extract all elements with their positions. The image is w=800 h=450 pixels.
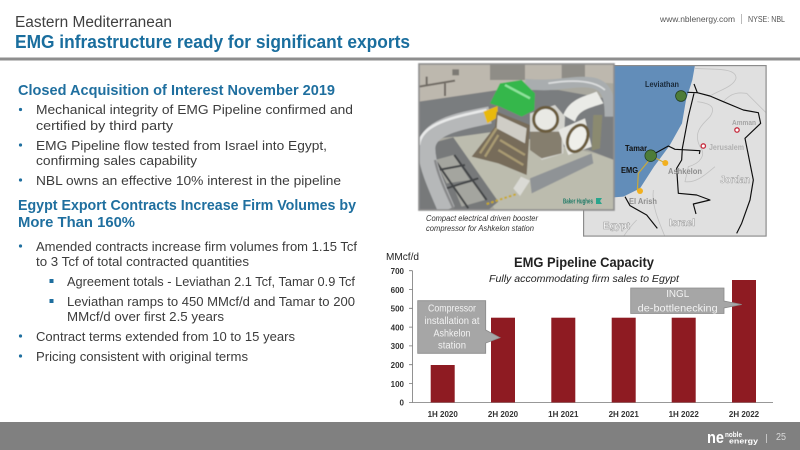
y-axis unit: MMcf/d bbox=[386, 252, 419, 263]
bullet list: contract terms: MMcf/d over first 2.5 years bbox=[67, 309, 225, 324]
bar chart: EMG pipeline capacity bbox=[386, 252, 773, 419]
y-axis labels: 300 bbox=[391, 342, 405, 351]
logo: Noble Energy: ne bbox=[707, 428, 724, 447]
map labels: Leviathan bbox=[645, 80, 679, 89]
bullet list: pipeline status bbox=[19, 102, 353, 188]
map labels: EMG bbox=[621, 166, 638, 175]
photo: booster compressor bbox=[419, 64, 614, 210]
y-axis labels: 500 bbox=[391, 304, 405, 314]
callout: compressor installation: Compressor bbox=[428, 304, 477, 315]
map: Eastern Mediterranean pipeline bbox=[580, 65, 767, 237]
map labels: Ashkelon bbox=[668, 167, 702, 176]
heading: export contracts bbox=[18, 197, 357, 231]
slide header bbox=[0, 14, 800, 60]
bullet list: contract terms: Contract terms extended from 10 to 15 years bbox=[36, 329, 295, 344]
x-axis labels bbox=[428, 410, 760, 419]
map labels: Egypt bbox=[603, 221, 631, 232]
callout: compressor installation: installation at bbox=[424, 316, 480, 327]
y-axis labels bbox=[391, 267, 405, 408]
icon: Ashkelon station bbox=[662, 160, 668, 166]
y-axis labels: 700 bbox=[391, 267, 405, 276]
logo: Baker Hughes: Baker Hughes bbox=[563, 198, 593, 206]
map labels: Jordan bbox=[720, 175, 750, 186]
website and ticker: NYSE: NBL bbox=[748, 15, 785, 24]
bullet list: pipeline status: Mechanical integrity of EMG Pipeline confirmed and bbox=[36, 102, 353, 117]
chart title: EMG Pipeline Capacity bbox=[514, 254, 654, 270]
website and ticker bbox=[659, 14, 785, 24]
y-axis labels: 0 bbox=[400, 398, 405, 408]
callout: compressor installation bbox=[418, 301, 500, 353]
map labels: Israel bbox=[669, 218, 695, 229]
panel: closed acquisition text bbox=[18, 82, 353, 188]
logo: Noble Energy: noble bbox=[725, 432, 742, 439]
logo: Noble Energy: energy bbox=[729, 438, 758, 446]
panel: export contracts text bbox=[18, 197, 357, 364]
icon: Leviathan field bbox=[676, 91, 686, 101]
photo caption: Compact electrical driven booster bbox=[426, 214, 538, 223]
map labels: Jerusalem bbox=[709, 143, 744, 152]
icon: El Arish station bbox=[637, 188, 643, 194]
y-axis labels: 400 bbox=[391, 324, 405, 332]
bullet list: contract terms: Pricing consistent with original terms bbox=[36, 349, 249, 364]
bullet list: pipeline status: NBL owns an effective 10% interest in the pipeline bbox=[36, 173, 341, 188]
chart subtitle: Fully accommodating firm sales to Egypt bbox=[489, 273, 680, 285]
axes bbox=[409, 271, 773, 402]
bullet list: contract terms bbox=[19, 239, 357, 364]
photo caption bbox=[426, 214, 538, 233]
bullet list: contract terms: Leviathan ramps to 450 MMcf/d and Tamar to 200 bbox=[67, 294, 355, 309]
website and ticker: www.nblenergy.com bbox=[659, 15, 735, 24]
bullet list: pipeline status: confirming sales capability bbox=[36, 153, 198, 168]
callout: compressor installation: station bbox=[438, 340, 466, 351]
y-axis labels: 200 bbox=[391, 361, 405, 370]
heading: closed acquisition: Closed Acquisition of Interest November 2019 bbox=[18, 82, 335, 99]
x-axis labels: 1H 2020 bbox=[428, 410, 458, 419]
map labels: Amman bbox=[732, 120, 756, 127]
bars bbox=[431, 280, 756, 402]
map labels: El Arish bbox=[629, 197, 657, 206]
x-axis labels: 2H 2022 bbox=[729, 410, 760, 419]
bullet list: contract terms: to 3 Tcf of total contracted quantities bbox=[36, 254, 250, 269]
icon: Jerusalem marker bbox=[701, 144, 706, 148]
footer bar bbox=[0, 422, 800, 450]
heading: export contracts: More Than 160% bbox=[18, 214, 135, 231]
x-axis labels: 2H 2020 bbox=[488, 410, 519, 419]
main title: EMG infrastructure ready for significant exports bbox=[15, 32, 410, 52]
y-axis labels: 600 bbox=[391, 286, 405, 295]
x-axis labels: 2H 2021 bbox=[609, 410, 639, 419]
x-axis labels: 1H 2021 bbox=[548, 410, 579, 419]
photo caption: compressor for Ashkelon station bbox=[426, 224, 535, 233]
bullet list: pipeline status: EMG Pipeline flow tested from Israel into Egypt, bbox=[36, 138, 327, 153]
map labels: Tamar bbox=[625, 144, 647, 153]
heading: export contracts: Egypt Export Contracts Increase Firm Volumes by bbox=[18, 197, 357, 214]
y-axis labels: 100 bbox=[391, 380, 405, 389]
bullet list: contract terms: Agreement totals - Leviathan 2.1 Tcf, Tamar 0.9 Tcf bbox=[67, 274, 355, 289]
icon: Tamar field bbox=[645, 150, 656, 162]
bullet list: pipeline status: certified by third party bbox=[36, 118, 174, 133]
section title: Eastern Mediterranean bbox=[15, 14, 172, 31]
callout: compressor installation: Ashkelon bbox=[434, 329, 470, 340]
page number: 25 bbox=[776, 432, 786, 443]
callout: INGL de-bottlenecking bbox=[631, 288, 742, 315]
x-axis labels: 1H 2022 bbox=[669, 410, 699, 419]
callout: INGL de-bottlenecking: de-bottlenecking bbox=[638, 304, 718, 315]
map labels bbox=[603, 80, 756, 232]
logo: Noble Energy bbox=[707, 428, 758, 447]
callout: INGL de-bottlenecking: INGL bbox=[666, 289, 690, 300]
icon: Amman marker bbox=[735, 128, 739, 132]
bullet list: contract terms: Amended contracts increase firm volumes from 1.15 Tcf bbox=[36, 239, 357, 254]
